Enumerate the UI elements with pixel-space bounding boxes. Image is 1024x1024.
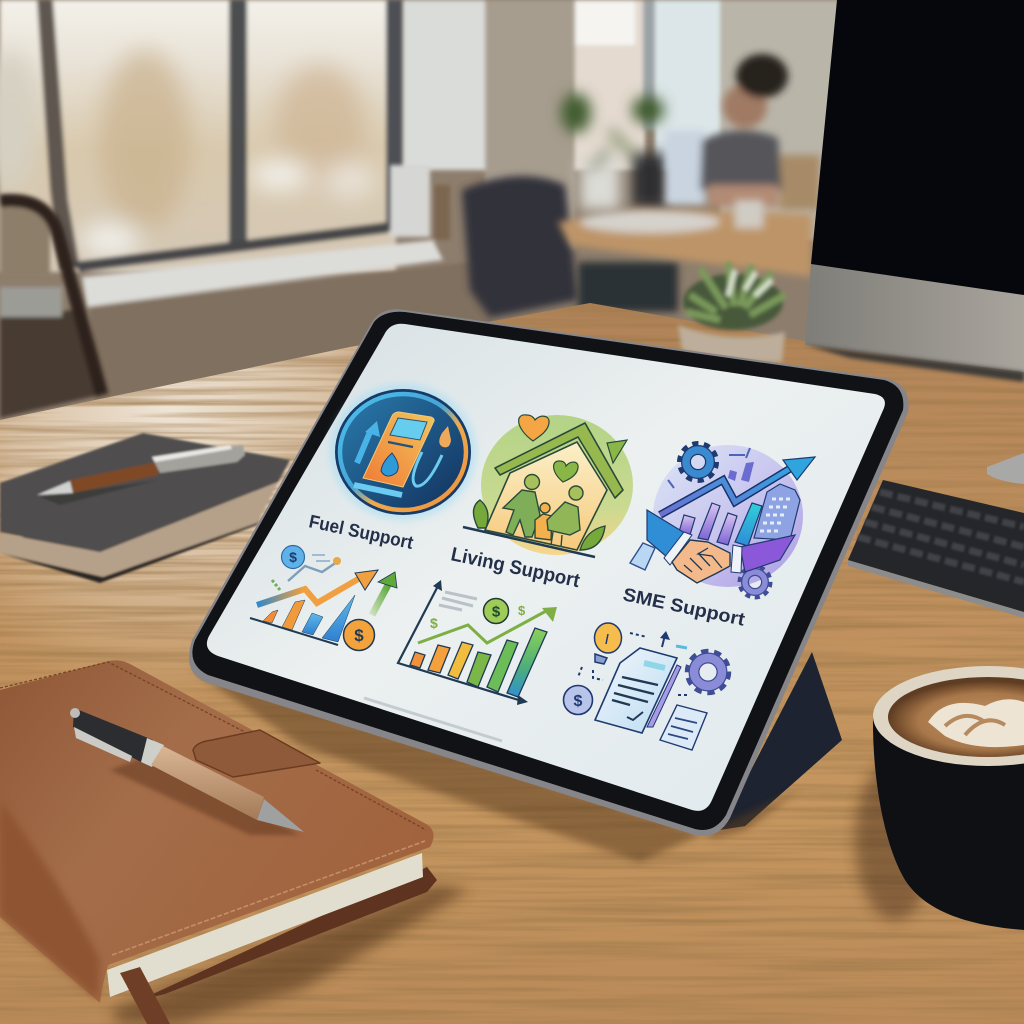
strap	[193, 730, 320, 777]
tablet shadow	[190, 668, 800, 862]
chart: sme paperwork	[564, 623, 728, 750]
chart: living cost bars	[398, 580, 557, 705]
icon: gear	[688, 652, 728, 692]
icon: fuel support	[330, 384, 476, 520]
desk surface	[0, 300, 1024, 1024]
panel: window sill and lower wall	[82, 165, 500, 400]
desk plant	[678, 262, 785, 362]
tablet stand	[720, 652, 842, 830]
chair middle	[462, 176, 578, 318]
chart: rising fuel arrow: $	[354, 626, 364, 645]
chart: living cost bars: $	[492, 604, 501, 620]
chart: sme paperwork: $	[574, 693, 583, 710]
home indicator	[364, 698, 502, 741]
plant background	[561, 93, 668, 210]
monitor	[805, 0, 1024, 382]
family figures	[473, 474, 605, 550]
shadow under cup	[855, 760, 935, 920]
background room	[0, 0, 1024, 430]
chart: rising fuel arrow: $	[289, 549, 297, 565]
label: living support: Living Support	[449, 543, 582, 592]
icon: light bulb	[594, 623, 622, 664]
handshake	[647, 510, 795, 583]
dark notebook	[0, 433, 290, 583]
panel: wall and pillar	[403, 0, 840, 250]
pen on dark notebook	[37, 445, 245, 505]
top gear	[680, 444, 716, 480]
device corner	[987, 453, 1024, 484]
chair left	[0, 200, 102, 418]
bottom gear	[740, 567, 770, 597]
background table	[558, 200, 812, 277]
chart: living cost bars: $	[430, 615, 438, 631]
label: fuel support: Fuel Support	[307, 510, 415, 553]
keyboard	[848, 480, 1024, 618]
chart: living cost bars: $	[518, 603, 526, 618]
bars and building	[679, 484, 800, 546]
coffee cup	[873, 666, 1024, 930]
tablet	[189, 309, 909, 836]
icon: sme support	[630, 444, 815, 597]
label: sme support: SME Support	[621, 583, 747, 630]
panel: window view	[0, 0, 403, 272]
chart: rising fuel arrow	[250, 546, 397, 650]
leather notebook	[0, 660, 437, 1024]
under table	[578, 262, 678, 312]
shadow under leather notebook	[110, 885, 470, 1024]
pen on leather notebook	[70, 708, 304, 835]
screen	[207, 324, 885, 811]
icon: living support	[463, 415, 633, 557]
blurred person	[665, 54, 820, 210]
